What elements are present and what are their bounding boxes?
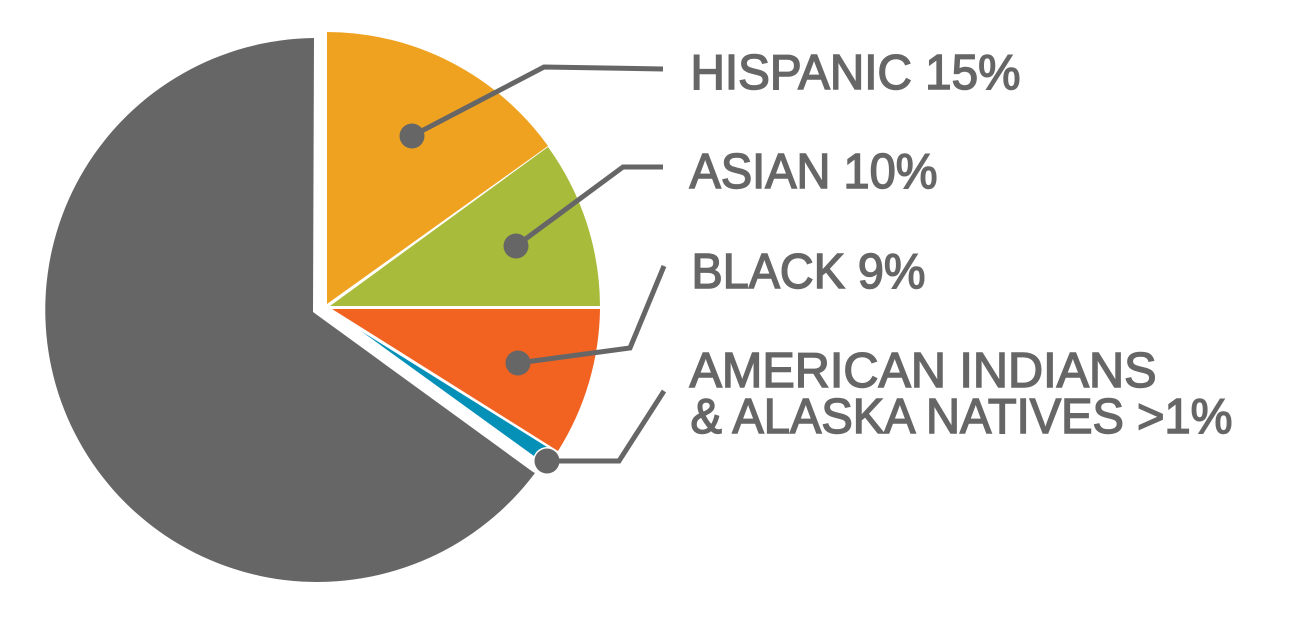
leader: Hispanic — [400, 67, 663, 148]
label: Hispanic: HISPANIC 15% — [690, 46, 1020, 100]
leader: American Indians — [533, 391, 664, 475]
slice: Black — [332, 309, 600, 451]
label: American Indians and Alaska Natives: AMERICAN INDIANS — [690, 344, 1156, 398]
slice: majority grey — [45, 38, 535, 582]
leader: Black — [506, 266, 664, 376]
slice: Asian — [330, 147, 600, 306]
label: American Indians and Alaska Natives — [690, 344, 1232, 444]
leader: Asian — [504, 167, 663, 258]
label: Black: BLACK 9% — [692, 245, 926, 299]
slice: Hispanic — [327, 32, 548, 304]
slice: American Indians and Alaska Natives — [361, 331, 555, 464]
label: American Indians and Alaska Natives: & ALASKA NATIVES >1% — [690, 390, 1232, 444]
label: Asian: ASIAN 10% — [690, 145, 938, 199]
